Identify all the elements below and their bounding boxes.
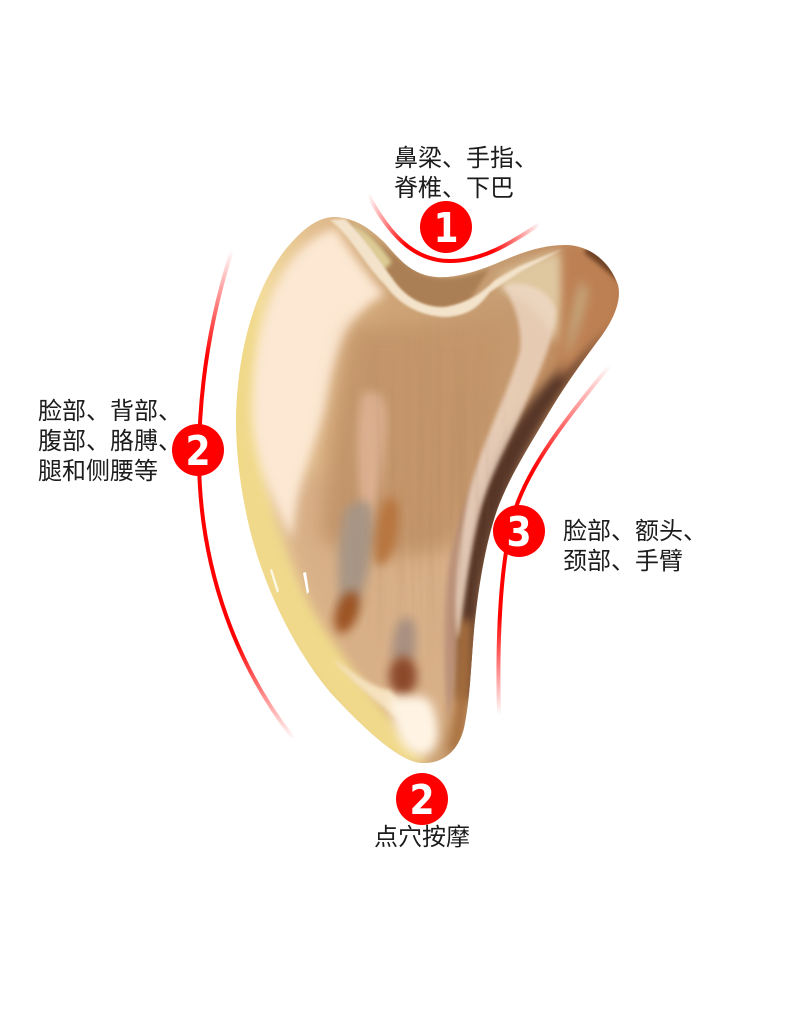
marker 2 bottom: 2 [409,777,435,825]
arc: right curve [498,365,610,715]
marker 2 left: 2 [185,428,211,476]
stone: lower brown blot two [389,656,417,696]
marker 3 [493,505,545,557]
arc: left side [199,250,293,738]
stone: yellow left edge [236,290,430,765]
stone: right lower amber edge [446,620,472,755]
label: face, forehead, neck, arm: 颈部、手臂 [563,548,683,575]
stone: wing pale area [500,252,564,345]
gua sha stone [230,210,625,770]
stone: centre warm panel [320,312,508,555]
stone: brown pink band inside edge [443,487,486,712]
label: nose, fingers, spine, chin [394,145,538,202]
marker 2 bottom [396,773,448,825]
marker 2 left [172,424,224,476]
label: face, forehead, neck, arm [563,518,707,575]
marker 1 [420,201,472,253]
stone: bottom gloss [334,660,398,716]
label: nose, fingers, spine, chin: 脊椎、下巴 [394,175,514,202]
marker 1: 1 [433,205,459,253]
stone: right dark edge [458,325,608,700]
stone: pale diagonal highlight [456,284,556,640]
label: face, forehead, neck, arm: 脸部、额头、 [563,518,707,545]
stone: wing dark tip [585,247,620,282]
label: face, back, abdomen, arms, legs, waist [38,398,182,485]
marker 3: 3 [506,509,532,557]
label: acupoint massage: 点穴按摩 [374,824,470,851]
stone: upper yellow tint [350,222,392,272]
stone: bottom white tip [391,695,438,756]
stone: ridge gloss line [330,219,563,317]
label: face, back, abdomen, arms, legs, waist: 腿和侧腰等 [38,458,158,485]
stone: fine grain streaks [477,504,478,507]
stone: warm lower body [275,476,454,722]
label: nose, fingers, spine, chin: 鼻梁、手指、 [394,145,538,172]
stone: orange streak [375,497,398,565]
stone: wing green tint [566,280,588,360]
stone: lower grey band two [392,617,416,660]
stone: cream highlight left [252,228,385,540]
stone: specular marks [270,569,309,594]
stone: upper brown shoulder [345,222,490,309]
stone: wing colours [560,248,620,380]
label: face, back, abdomen, arms, legs, waist: 腹部、胳膊、 [38,428,182,455]
stone: grey vertical band [338,500,373,620]
arc: top notch [368,195,540,261]
infographic: gua sha board usage areas [38,146,692,848]
label: face, back, abdomen, arms, legs, waist: 脸部、背部、 [38,398,182,425]
stone: pink centre strip [357,391,386,535]
stone: lower brown blot [330,588,364,636]
